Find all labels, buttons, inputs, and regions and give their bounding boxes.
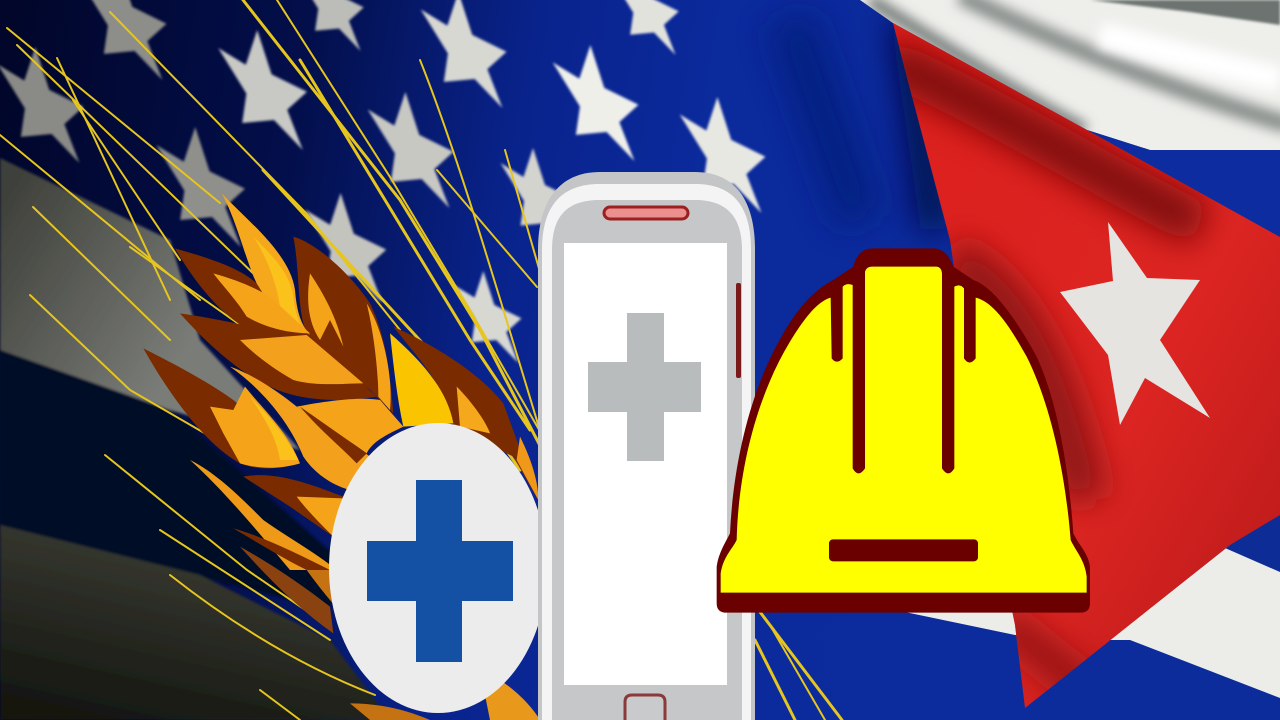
icon: smartphone <box>538 172 755 720</box>
background: dark flag stripes <box>0 158 390 720</box>
visor bar <box>829 539 978 561</box>
icon: safety helmet <box>717 248 1090 613</box>
icon: medical cross in circle <box>329 423 547 713</box>
background: Cuban flag star <box>1060 222 1210 425</box>
background: Cuban flag lower blue stripe <box>1225 515 1280 572</box>
home button <box>625 695 665 720</box>
background: US flag stars <box>0 0 766 363</box>
wheat ear <box>143 193 540 720</box>
background: Cuban flag upper blue stripe <box>1087 130 1280 237</box>
side button <box>736 283 741 378</box>
background: Cuban flag lower white stripe <box>900 545 1280 698</box>
background: Cuban flag red triangle <box>880 0 1280 720</box>
background: Cuban flag top white stripe <box>860 0 1280 150</box>
speaker <box>604 207 688 219</box>
wheat awns <box>0 0 842 720</box>
medical cross <box>588 313 701 461</box>
